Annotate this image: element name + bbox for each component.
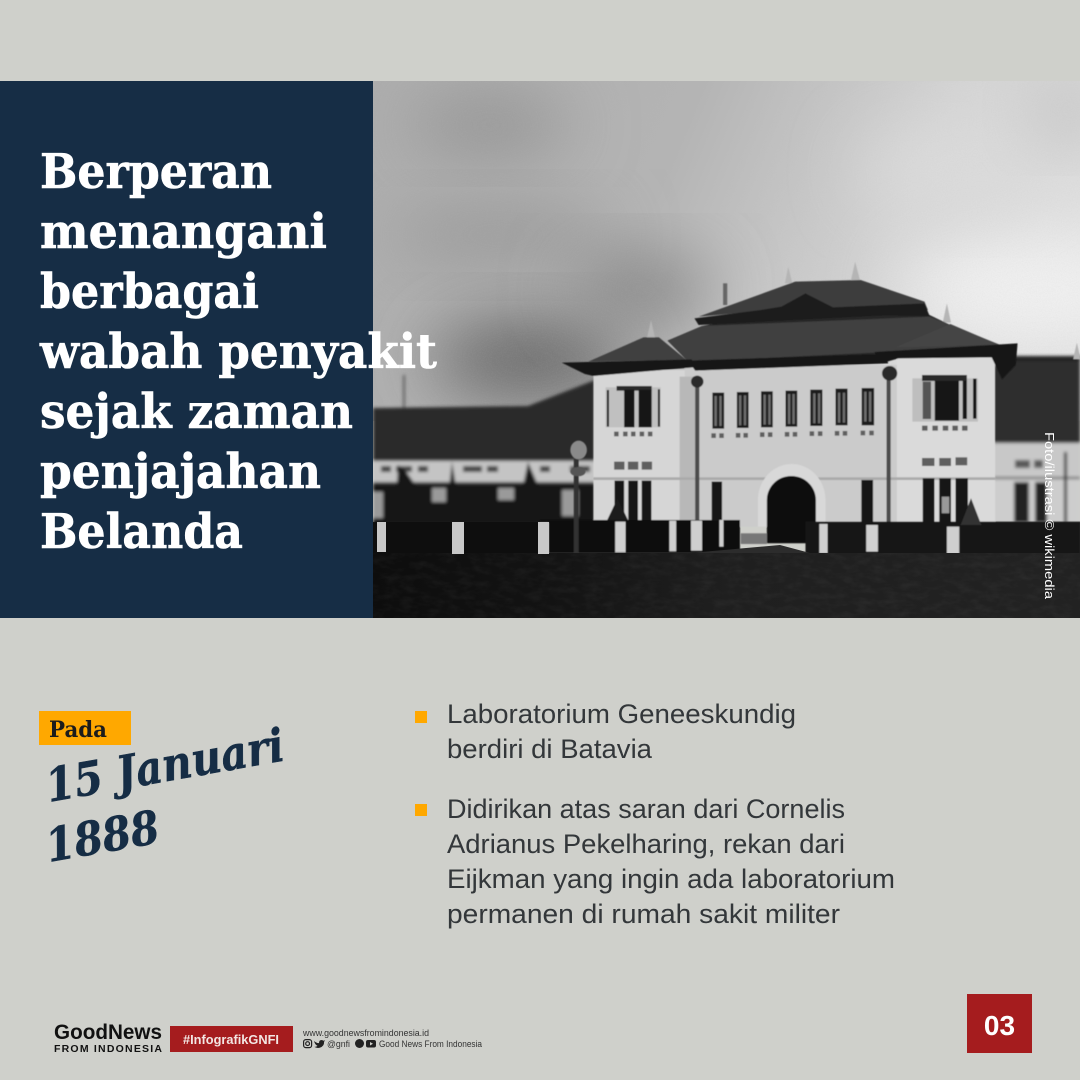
trees in front of left wing	[395, 462, 538, 486]
logo: GoodNews From Indonesia: GoodNews	[54, 1021, 162, 1044]
hashtag badge: #InfografikGNFI	[183, 1032, 279, 1047]
left wing of building	[373, 375, 595, 525]
bullet list	[415, 699, 895, 929]
bullet 2: Eijkman yang ingin ada laboratorium	[447, 864, 895, 894]
left-wing posts	[377, 522, 549, 554]
right wing of building	[992, 356, 1080, 525]
foreground lawn	[373, 545, 1080, 618]
main building	[540, 262, 1080, 557]
date label: Pada: Pada	[49, 717, 107, 743]
hedges and posts	[540, 520, 740, 553]
photo: colonial laboratory building	[373, 80, 1080, 618]
website and social handles: Good News From Indonesia	[379, 1039, 482, 1049]
light wall patches behind trees	[373, 488, 578, 518]
logo: GoodNews From Indonesia: FROM INDONESIA	[54, 1043, 162, 1055]
title	[39, 144, 437, 560]
bullet 1: Laboratorium Geneeskundig	[447, 699, 796, 729]
date: 15 Januari 1888: 1888	[42, 800, 163, 873]
walls	[593, 370, 687, 525]
roof backing	[668, 313, 1000, 371]
website and social handles: www.goodnewsfromindonesia.id	[302, 1028, 429, 1038]
left-wing dark foreground	[373, 522, 538, 553]
bullet 2: Didirikan atas saran dari Cornelis	[447, 794, 845, 824]
vent blocks	[614, 426, 968, 470]
title: penjajahan	[40, 444, 321, 500]
finials	[647, 262, 1080, 359]
website and social handles: @gnfi	[327, 1039, 350, 1049]
title: berbagai	[40, 264, 259, 320]
title panel	[0, 81, 373, 618]
photo credit: Foto/ilustrasi © wikimedia	[1042, 432, 1056, 599]
page number: 03	[984, 1010, 1015, 1041]
title: wabah penyakit	[39, 324, 437, 380]
icon: twitter	[314, 1040, 325, 1048]
title: Berperan	[40, 144, 272, 200]
entrance arch	[758, 464, 825, 527]
lamp post	[570, 441, 587, 557]
tower windows	[606, 387, 661, 427]
date: 15 Januari 1888: 15 Januari	[42, 718, 288, 813]
right tower roof	[949, 324, 982, 338]
page number	[967, 994, 1032, 1053]
bullet 1	[415, 699, 796, 764]
drain pipes	[695, 383, 699, 520]
ground floor windows and doors	[614, 478, 968, 525]
title: menangani	[40, 204, 327, 260]
date label: Pada	[39, 711, 131, 745]
logo: GoodNews From Indonesia	[54, 1021, 162, 1055]
central windows	[712, 388, 874, 429]
icon: instagram	[304, 1040, 312, 1048]
bullet 2	[415, 794, 895, 929]
bullet 1: berdiri di Batavia	[447, 734, 653, 764]
icon: facebook	[355, 1039, 364, 1048]
left tower roof	[588, 337, 687, 362]
title: Belanda	[40, 504, 243, 560]
upper roof	[699, 280, 928, 317]
website and social handles	[302, 1028, 482, 1049]
photo sky	[373, 80, 1080, 421]
hashtag badge	[170, 1026, 293, 1052]
middle roof	[668, 317, 1000, 362]
bullet 2: Adrianus Pekelharing, rekan dari	[447, 829, 845, 859]
title: sejak zaman	[40, 384, 353, 440]
date: 15 Januari 1888	[42, 718, 288, 873]
icon: youtube	[366, 1040, 376, 1048]
roof eaves	[562, 343, 1018, 379]
bullet 2: permanen di rumah sakit militer	[447, 899, 840, 929]
